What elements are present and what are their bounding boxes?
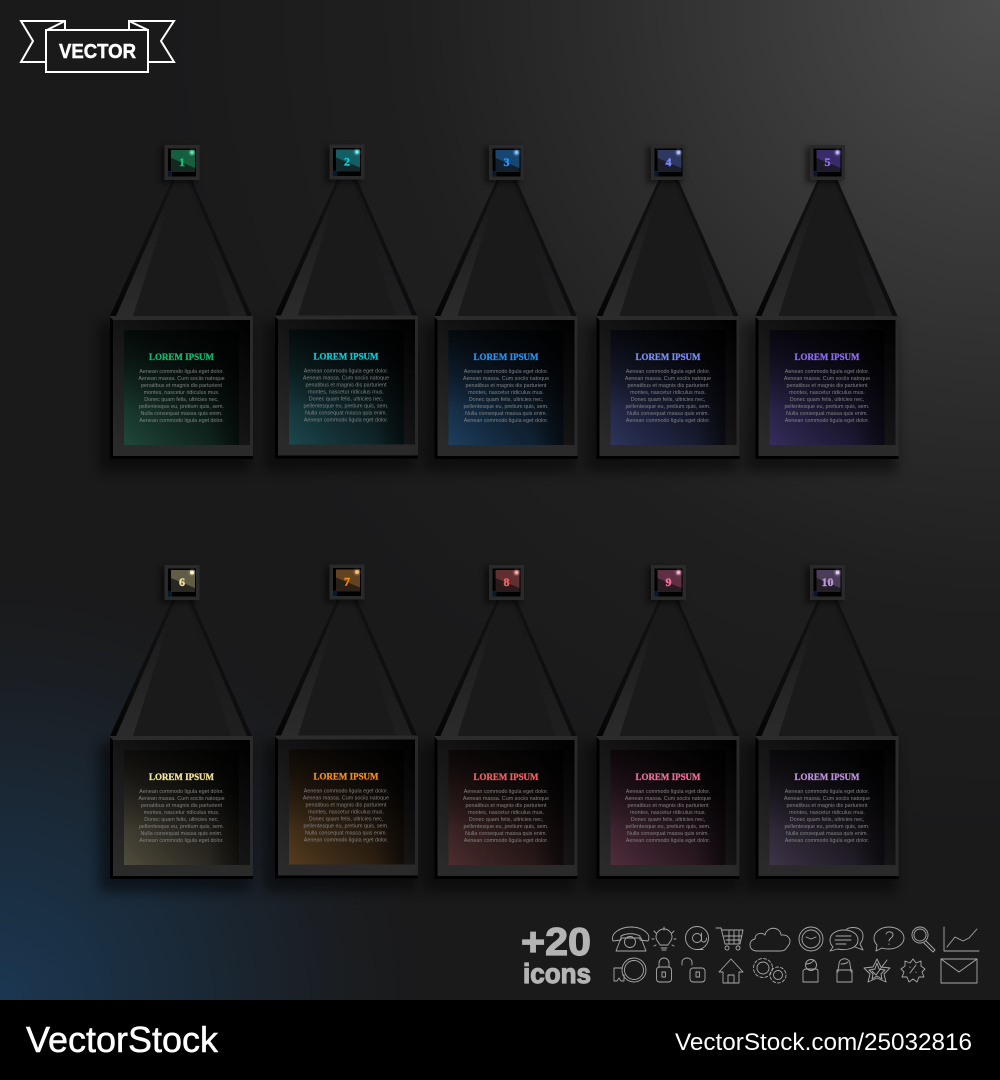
text block 3: Aenean massa. Cum sociis natoque xyxy=(463,376,549,382)
heading 1: LOREM IPSUM xyxy=(149,353,214,363)
text block 3: montes, nascetur ridiculus mus. xyxy=(468,390,544,396)
text block 5: penatibus et magnis dis parturient xyxy=(787,383,868,389)
text block 5: pellentesque eu, pretium quis, sem. xyxy=(784,404,870,410)
number 3: 3 xyxy=(504,155,510,169)
text block 3: Nulla consequat massa quis enim. xyxy=(465,411,547,417)
icon: gears xyxy=(754,958,786,983)
text block 8: Aenean commodo ligula eget dolor. xyxy=(464,838,548,844)
text block 4 xyxy=(625,369,711,424)
text block 6: Aenean massa. Cum sociis natoque xyxy=(138,796,225,802)
text block 7 xyxy=(303,788,389,844)
icon: speech bubbles xyxy=(830,928,863,951)
icon: question bubble xyxy=(874,927,904,951)
text block 7: montes, nascetur ridiculus mus. xyxy=(308,810,384,816)
text block 7: penatibus et magnis dis parturient xyxy=(306,802,387,808)
number 4: 4 xyxy=(666,155,672,169)
text block 10: Aenean commodo ligula eget dolor. xyxy=(785,838,869,844)
card 5 xyxy=(744,145,898,472)
text block 2: pellentesque eu, pretium quis, sem. xyxy=(303,404,389,410)
number 2: 2 xyxy=(344,154,350,168)
heading 7: LOREM IPSUM xyxy=(314,772,379,782)
text block 3: pellentesque eu, pretium quis, sem. xyxy=(463,404,549,410)
text block 9: Nulla consequat massa quis enim. xyxy=(627,831,709,837)
number 1: 1 xyxy=(179,155,185,169)
text block 5: Aenean massa. Cum sociis natoque xyxy=(784,376,870,382)
text block 9: Aenean commodo ligula eget dolor. xyxy=(626,789,710,795)
text block 8: penatibus et magnis dis parturient xyxy=(466,803,547,809)
number 6: 6 xyxy=(179,575,185,589)
number 7: 7 xyxy=(344,574,350,588)
icon: key ring xyxy=(614,958,646,982)
icon: line chart xyxy=(944,927,979,951)
text block 9: pellentesque eu, pretium quis, sem. xyxy=(625,824,711,830)
footer url: VectorStock.com/25032816 xyxy=(675,1029,972,1056)
text block 5: Donec quam felis, ultricies nec, xyxy=(790,397,865,403)
footer bar xyxy=(0,1000,1000,1080)
icon: telephone xyxy=(612,927,649,951)
text block 4: montes, nascetur ridiculus mus. xyxy=(630,390,706,396)
text block 2: Nulla consequat massa quis enim. xyxy=(305,410,387,416)
number 5: 5 xyxy=(824,155,830,169)
text block 8: Donec quam felis, ultricies nec, xyxy=(469,817,544,823)
icon: open padlock xyxy=(682,958,705,982)
text block 2: Aenean commodo ligula eget dolor. xyxy=(304,418,388,424)
text block 6: Nulla consequat massa quis enim. xyxy=(140,831,223,837)
text block 5: Nulla consequat massa quis enim. xyxy=(786,411,868,417)
card 6 xyxy=(99,565,253,892)
heading 6: LOREM IPSUM xyxy=(149,773,214,783)
icon: discount burst xyxy=(901,959,925,982)
label: +20 icons xyxy=(521,921,591,989)
text block 1: Aenean massa. Cum sociis natoque xyxy=(138,376,225,382)
card 8 xyxy=(424,565,578,892)
heading 9: LOREM IPSUM xyxy=(636,773,701,783)
icon: at sign xyxy=(686,926,708,950)
card 1 xyxy=(99,145,253,472)
text block 5: Aenean commodo ligula eget dolor. xyxy=(785,418,869,424)
text block 2: montes, nascetur ridiculus mus. xyxy=(308,390,384,396)
icon: light bulb xyxy=(652,927,676,950)
footer brand: VectorStock xyxy=(26,1019,219,1060)
badge: VECTOR ribbon xyxy=(21,21,174,72)
icon: clock xyxy=(799,927,823,951)
text block 6: penatibus et magnis dis parturient xyxy=(141,803,222,809)
text block 5: Aenean commodo ligula eget dolor. xyxy=(785,369,869,375)
text block 10: pellentesque eu, pretium quis, sem. xyxy=(784,824,870,830)
text block 10: Aenean massa. Cum sociis natoque xyxy=(784,796,870,802)
number 8: 8 xyxy=(504,575,510,589)
text block 7: Aenean massa. Cum sociis natoque xyxy=(303,796,389,802)
text block 9: Aenean massa. Cum sociis natoque xyxy=(625,796,711,802)
text block 1: pellentesque eu, pretium quis, sem. xyxy=(139,404,224,410)
label: +20 icons: icons xyxy=(523,958,591,989)
text block 4: Nulla consequat massa quis enim. xyxy=(627,411,709,417)
icon: cloud xyxy=(750,928,790,951)
icon: man xyxy=(803,960,818,982)
text block 9: penatibus et magnis dis parturient xyxy=(628,803,709,809)
text block 9: montes, nascetur ridiculus mus. xyxy=(630,810,706,816)
heading 8: LOREM IPSUM xyxy=(474,773,539,783)
text block 7: Aenean commodo ligula eget dolor. xyxy=(304,788,388,794)
icon set xyxy=(612,926,979,983)
text block 6: pellentesque eu, pretium quis, sem. xyxy=(139,824,224,830)
text block 1: Aenean commodo ligula eget dolor. xyxy=(139,418,224,424)
text block 8: pellentesque eu, pretium quis, sem. xyxy=(463,824,549,830)
text block 2: Aenean massa. Cum sociis natoque xyxy=(303,376,389,382)
heading 5: LOREM IPSUM xyxy=(794,353,860,363)
text block 10: montes, nascetur ridiculus mus. xyxy=(789,810,865,816)
text block 1: montes, nascetur ridiculus mus. xyxy=(144,390,219,396)
icon: shopping cart xyxy=(716,928,743,950)
card 9 xyxy=(586,565,740,892)
text block 7: Aenean commodo ligula eget dolor. xyxy=(304,838,388,844)
text block 6: Donec quam felis, ultricies nec, xyxy=(144,817,219,823)
text block 8: montes, nascetur ridiculus mus. xyxy=(468,810,544,816)
icon: padlock xyxy=(656,958,672,982)
text block 10: Nulla consequat massa quis enim. xyxy=(786,831,868,837)
text block 1: Aenean commodo ligula eget dolor. xyxy=(139,369,224,375)
card 2 xyxy=(264,144,418,472)
text block 4: Aenean commodo ligula eget dolor. xyxy=(626,418,710,424)
icon: envelope xyxy=(941,959,977,983)
text block 4: Aenean commodo ligula eget dolor. xyxy=(626,369,710,375)
text block 10: penatibus et magnis dis parturient xyxy=(787,803,868,809)
heading 10: LOREM IPSUM xyxy=(794,773,860,783)
heading 4: LOREM IPSUM xyxy=(636,353,701,363)
text block 2: Donec quam felis, ultricies nec, xyxy=(309,396,384,402)
number 9: 9 xyxy=(666,575,672,589)
icon: house xyxy=(719,959,743,983)
text block 4: pellentesque eu, pretium quis, sem. xyxy=(625,404,711,410)
number 10: 10 xyxy=(822,575,834,589)
text block 1: penatibus et magnis dis parturient xyxy=(141,383,222,389)
heading 2: LOREM IPSUM xyxy=(314,352,379,362)
badge: VECTOR ribbon: VECTOR xyxy=(59,41,137,63)
card 4 xyxy=(586,145,740,472)
text block 5: montes, nascetur ridiculus mus. xyxy=(789,390,865,396)
icon: magnifier xyxy=(912,927,935,952)
text block 10: Aenean commodo ligula eget dolor. xyxy=(785,789,869,795)
text block 4: Aenean massa. Cum sociis natoque xyxy=(625,376,711,382)
icon: woman xyxy=(837,959,852,982)
text block 9: Aenean commodo ligula eget dolor. xyxy=(626,838,710,844)
label: +20 icons: +20 xyxy=(521,921,591,964)
icon: star with check xyxy=(864,959,890,982)
heading 3: LOREM IPSUM xyxy=(474,353,539,363)
text block 3 xyxy=(463,369,549,424)
text block 8 xyxy=(463,789,549,844)
text block 1 xyxy=(138,369,225,424)
text block 6: montes, nascetur ridiculus mus. xyxy=(144,810,219,816)
text block 7: Donec quam felis, ultricies nec, xyxy=(309,816,384,822)
text block 9: Donec quam felis, ultricies nec, xyxy=(631,817,706,823)
text block 2: penatibus et magnis dis parturient xyxy=(306,382,387,388)
text block 10: Donec quam felis, ultricies nec, xyxy=(790,817,865,823)
text block 8: Aenean massa. Cum sociis natoque xyxy=(463,796,549,802)
text block 5 xyxy=(784,369,870,424)
text block 10 xyxy=(784,789,870,844)
text block 3: penatibus et magnis dis parturient xyxy=(466,383,547,389)
text block 9 xyxy=(625,789,711,844)
text block 6: Aenean commodo ligula eget dolor. xyxy=(139,838,224,844)
text block 1: Nulla consequat massa quis enim. xyxy=(140,411,223,417)
text block 2 xyxy=(303,368,389,424)
text block 7: Nulla consequat massa quis enim. xyxy=(305,830,387,836)
text block 8: Nulla consequat massa quis enim. xyxy=(465,831,547,837)
text block 4: penatibus et magnis dis parturient xyxy=(628,383,709,389)
card 7 xyxy=(264,564,418,892)
text block 3: Aenean commodo ligula eget dolor. xyxy=(464,369,548,375)
card 10 xyxy=(744,565,898,892)
text block 6: Aenean commodo ligula eget dolor. xyxy=(139,789,224,795)
text block 4: Donec quam felis, ultricies nec, xyxy=(631,397,706,403)
text block 8: Aenean commodo ligula eget dolor. xyxy=(464,789,548,795)
text block 6 xyxy=(138,789,225,844)
card 3 xyxy=(424,145,578,472)
text block 7: pellentesque eu, pretium quis, sem. xyxy=(303,824,389,830)
text block 2: Aenean commodo ligula eget dolor. xyxy=(304,368,388,374)
text block 3: Aenean commodo ligula eget dolor. xyxy=(464,418,548,424)
text block 3: Donec quam felis, ultricies nec, xyxy=(469,397,544,403)
text block 1: Donec quam felis, ultricies nec, xyxy=(144,397,219,403)
